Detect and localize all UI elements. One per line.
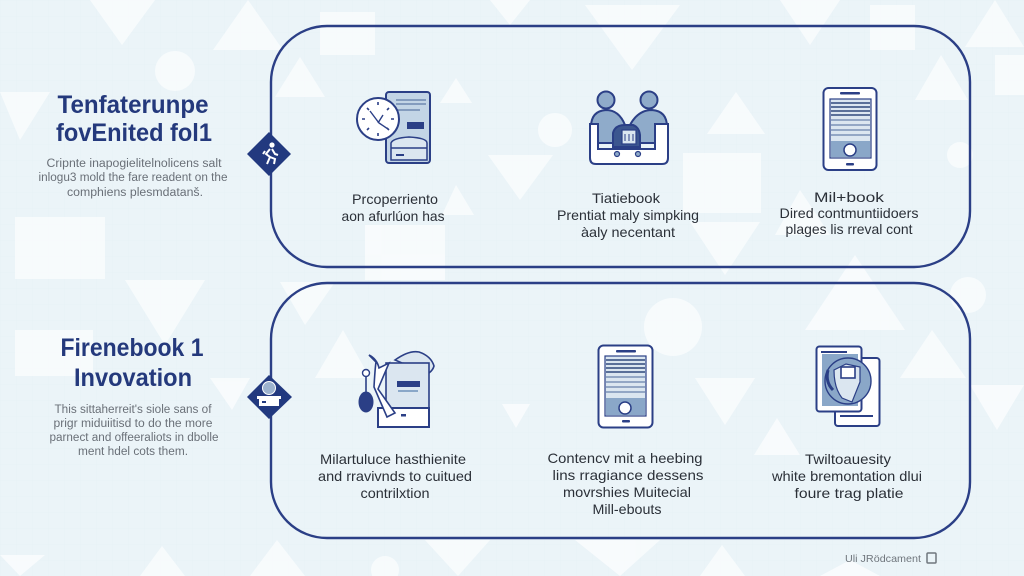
footer credit: Uli JRödcament [845,553,921,565]
label: top column 3: plages lis rreval cont [786,221,913,237]
icon: clock and document [357,92,430,163]
text block: top section description: Cripnte inapogielitelnolicens salt [46,158,222,170]
heading: top section: Tenfaterunpe [58,91,209,119]
icon: two people with tablet [590,92,668,164]
label: bottom column 3: white bremontation dlui [771,468,922,484]
label: top column 1: Prcoperriento [352,191,438,207]
heading: bottom section: Firenebook 1 [60,334,204,362]
text block: top section description [38,158,228,199]
heading: top section [56,91,212,147]
label: bottom column 1: and rravivnds to cuitued [318,468,472,484]
label: top column 2: àaly necentant [581,224,675,240]
label: bottom column 3 [771,451,922,501]
icon: tablet bottom [598,346,652,428]
icon: device with spoon and leaf [360,352,434,427]
heading: bottom section: Invovation [74,364,192,392]
label: bottom column 2: Mill-ebouts [592,501,662,517]
icon: overlapping documents [816,346,880,426]
label: bottom column 2 [548,450,704,517]
icon: top diamond [247,132,291,176]
icon: bottom diamond [247,375,292,419]
heading: top section: fovEnited fol1 [56,119,212,147]
label: top column 3: Mil+book [814,189,885,205]
label: top column 1: aon afurlúon has [342,208,444,224]
text block: bottom section description [50,404,219,458]
label: bottom column 3: foure trag platie [794,485,904,501]
heading: bottom section [60,334,204,392]
label: bottom column 2: lins rragiance dessens [552,467,704,483]
text block: bottom section description: This sittaherreit's siole sans of [54,404,212,416]
icon: tablet top [824,88,876,170]
label: bottom column 3: Twiltoauesity [805,451,891,467]
label: top column 3 [780,189,918,237]
label: top column 3: Dired contmuntiidoers [780,205,918,221]
panel: bottom [271,283,970,538]
label: top column 2: Prentiat maly simpking [557,207,699,223]
panel: top [271,26,970,267]
text block: bottom section description: ment hdel cots them. [78,446,188,458]
label: bottom column 1: contrilxtion [360,485,430,501]
label: bottom column 2: Contencv mit a heebing [548,450,702,466]
label: bottom column 2: movrshies Muitecial [563,484,691,500]
label: top column 2: Tiatiebook [592,190,661,206]
label: bottom column 1: Milartuluce hasthienite [320,451,466,467]
text block: bottom section description: parnect and offeeraliots in dbolle [50,432,219,444]
label: top column 1 [342,191,444,224]
text block: top section description: inlogu3 mold the fare readent on the [38,172,228,184]
text block: bottom section description: prigr miduiitisd to do the more [54,418,212,430]
label: bottom column 1 [318,451,472,501]
text block: top section description: comphiens plesmdatanš. [67,187,203,199]
label: top column 2 [557,190,699,240]
